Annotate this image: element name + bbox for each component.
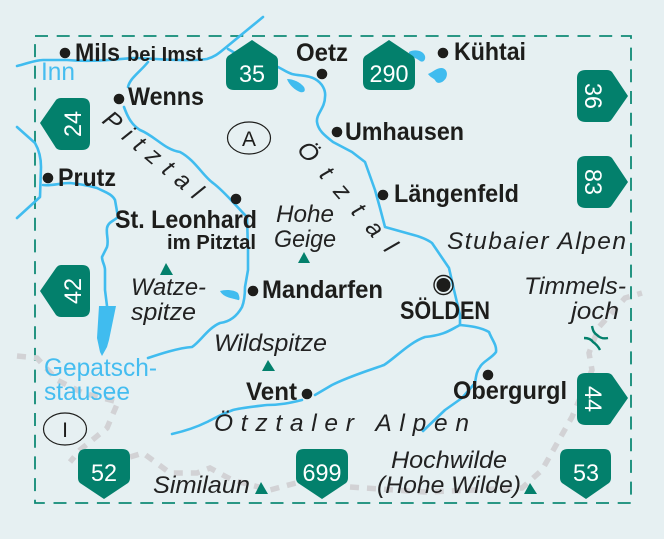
icon: Timmelsjoch pass bbox=[584, 326, 608, 350]
badge 42 bbox=[40, 265, 90, 317]
mountain and valley labels: (Hohe Wilde) bbox=[377, 472, 521, 499]
badge 83: 83 bbox=[579, 169, 606, 195]
town labels: Wenns bbox=[128, 83, 204, 111]
badge 699: 699 bbox=[302, 460, 342, 487]
town labels: Umhausen bbox=[345, 118, 464, 146]
town labels: im Pitztal bbox=[167, 232, 256, 254]
rivers bbox=[17, 17, 496, 434]
country marker A: A bbox=[242, 128, 256, 151]
town labels: St. Leonhard bbox=[115, 206, 257, 234]
lake: Gepatschstausee bbox=[97, 306, 116, 356]
town labels: Kühtai bbox=[454, 38, 526, 66]
border trail bbox=[17, 293, 642, 492]
badge 53: 53 bbox=[573, 460, 599, 487]
country marker I bbox=[44, 413, 86, 445]
badge 35: 35 bbox=[239, 61, 265, 88]
town labels: Längenfeld bbox=[394, 180, 519, 208]
mountain and valley labels: Timmels- bbox=[524, 273, 626, 300]
town labels: Prutz bbox=[58, 164, 116, 192]
lake near Mandarfen bbox=[220, 290, 240, 300]
lakes near Kühtai bbox=[409, 50, 447, 83]
country marker A bbox=[228, 122, 270, 154]
town labels: SÖLDEN bbox=[400, 296, 490, 325]
mountain and valley labels: joch bbox=[568, 298, 619, 325]
badge 290 bbox=[363, 40, 415, 90]
mountain and valley labels: Hochwilde bbox=[391, 447, 507, 474]
mountain and valley labels: Similaun bbox=[153, 472, 250, 499]
town labels bbox=[58, 38, 567, 406]
mountain and valley labels: Geige bbox=[274, 226, 336, 253]
mountain and valley labels: Hohe bbox=[276, 201, 334, 228]
water labels: Inn bbox=[41, 58, 75, 86]
town labels: Vent bbox=[246, 378, 298, 406]
mountain and valley labels: Pitztal bbox=[97, 106, 208, 205]
badge 44: 44 bbox=[579, 386, 606, 412]
badge 44 bbox=[577, 373, 628, 425]
badge 42: 42 bbox=[60, 278, 87, 304]
badge 24 bbox=[40, 98, 90, 150]
mountain and valley labels: Ötztal bbox=[291, 136, 403, 258]
town labels: bei Imst bbox=[127, 44, 203, 66]
mountain and valley labels: Ötztaler Alpen bbox=[214, 410, 469, 437]
Sölden symbol bbox=[434, 276, 453, 294]
badge 53 bbox=[560, 449, 611, 499]
mountain and valley labels: Stubaier Alpen bbox=[447, 228, 626, 255]
badge 290: 290 bbox=[370, 61, 408, 88]
badge 36: 36 bbox=[579, 83, 606, 109]
badge 35 bbox=[226, 40, 278, 90]
town labels: Mils bbox=[75, 39, 120, 67]
peak triangles bbox=[160, 252, 537, 494]
map frame bbox=[35, 36, 631, 503]
water labels: stausee bbox=[44, 378, 130, 406]
town labels: Obergurgl bbox=[453, 377, 567, 405]
water labels: Gepatsch- bbox=[44, 354, 157, 382]
badge 52: 52 bbox=[91, 460, 117, 487]
mountain and valley labels: Wildspitze bbox=[214, 330, 327, 357]
mountain and valley labels bbox=[97, 106, 626, 499]
badge 52 bbox=[78, 449, 130, 499]
badge 24: 24 bbox=[60, 111, 87, 137]
town labels: Mandarfen bbox=[262, 276, 383, 304]
mountain and valley labels: spitze bbox=[131, 299, 196, 326]
mountain and valley labels: Watze- bbox=[131, 274, 206, 301]
country marker I: I bbox=[62, 419, 68, 442]
lake near Oetz bbox=[287, 79, 305, 92]
badge 699 bbox=[296, 449, 348, 499]
badge 36 bbox=[577, 70, 628, 122]
town labels: Oetz bbox=[296, 39, 348, 67]
water labels bbox=[41, 58, 157, 406]
town dots bbox=[43, 48, 493, 399]
badge 83 bbox=[577, 156, 628, 208]
